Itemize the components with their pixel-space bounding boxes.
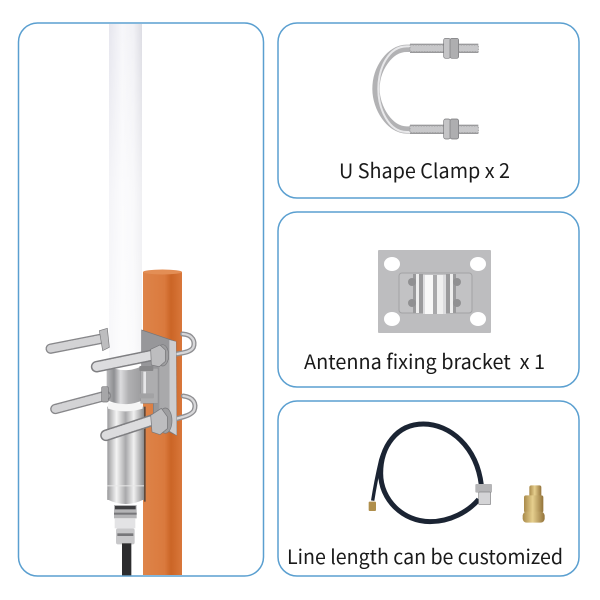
panel: U shape clamp: [278, 23, 579, 198]
clamp strap: [139, 366, 158, 403]
caption: Line length can be customized: [287, 541, 563, 570]
white ring: [108, 403, 143, 411]
lower steel cylinder: [107, 407, 146, 504]
mounting hardware: [51, 328, 195, 575]
antenna white radome: [109, 24, 142, 360]
icon: U clamp: [376, 38, 478, 139]
rear u-bolt bends: [177, 334, 195, 419]
orange mast: [143, 270, 182, 575]
icon: coaxial cable: [369, 423, 492, 522]
panel: cable and adapter: [278, 401, 579, 576]
hex nuts: [99, 328, 172, 435]
icon: SMA gold adapter: [523, 485, 545, 523]
bracket plate: [142, 330, 177, 435]
threaded bolts: [51, 339, 155, 435]
icon: bracket plate: [378, 250, 491, 333]
caption: Antenna fixing bracket x 1: [304, 346, 545, 375]
coax cable: [122, 543, 131, 575]
upper steel sleeve: [107, 365, 143, 404]
panel: antenna fixing bracket: [278, 212, 579, 387]
coax connector: [114, 505, 137, 544]
panel: antenna installation photo: [18, 23, 264, 576]
caption: U Shape Clamp x 2: [339, 155, 510, 184]
